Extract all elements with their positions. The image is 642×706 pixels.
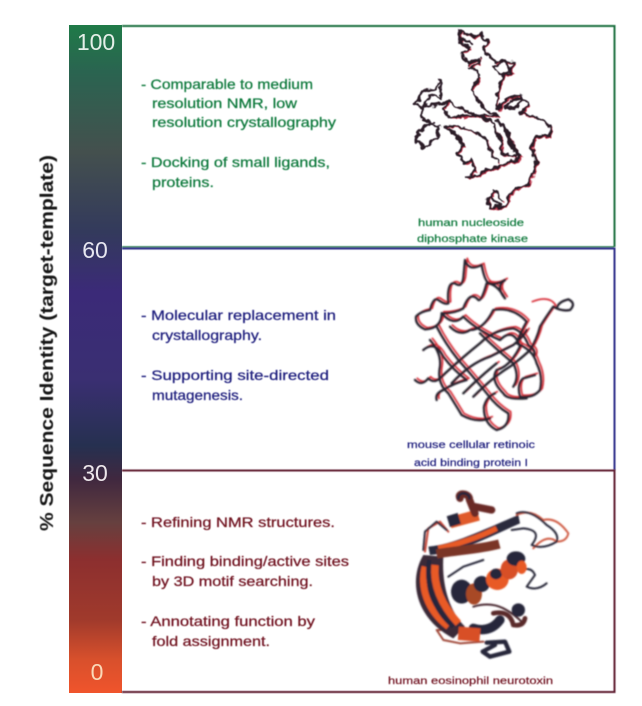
panel: medium identity <box>122 248 614 470</box>
scale label 100: 100 <box>77 29 115 55</box>
caption: kinase: human nucleoside <box>418 218 525 229</box>
caption: retinoic protein: mouse cellular retinoic <box>407 440 535 451</box>
gradient scale bar <box>69 25 122 693</box>
medium identity text: mutagenesis. <box>152 387 243 403</box>
high identity text <box>141 76 336 190</box>
lower helix <box>458 603 525 635</box>
caption: kinase <box>417 218 529 245</box>
bottom knot <box>483 642 509 657</box>
scale label 60: 60 <box>82 237 108 263</box>
high identity text: proteins. <box>152 174 214 190</box>
middle helix <box>451 551 527 605</box>
panel: high identity <box>122 26 614 247</box>
caption: neurotoxin: human eosinophil neurotoxin <box>388 676 553 687</box>
axis title: % Sequence Identity (target-template) <box>37 155 57 531</box>
caption: retinoic protein: acid binding protein I <box>414 458 528 469</box>
protein: nucleoside diphosphate kinase <box>413 32 551 209</box>
low identity text: by 3D motif searching. <box>152 573 313 589</box>
upper beta strands <box>428 515 520 555</box>
low identity text: - Finding binding/active sites <box>141 553 349 569</box>
medium identity text: crystallography. <box>152 327 262 343</box>
thin loops <box>423 512 568 643</box>
scale label 30: 30 <box>82 460 108 486</box>
high identity text: resolution crystallography <box>152 114 336 130</box>
low identity text <box>141 514 349 649</box>
caption: kinase: diphosphate kinase <box>417 234 529 245</box>
caption: retinoic protein <box>407 440 535 469</box>
panel: low identity <box>122 470 614 692</box>
top small helix <box>450 515 478 523</box>
scale label 0: 0 <box>91 659 103 685</box>
low identity text: fold assignment. <box>152 633 270 649</box>
high identity text: resolution NMR, low <box>152 95 298 111</box>
protein: eosinophil neurotoxin <box>416 493 568 657</box>
main beta strand <box>416 555 465 638</box>
medium identity text <box>141 307 336 403</box>
protein: retinoic acid binding protein <box>415 258 573 430</box>
medium identity text: - Supporting site-directed <box>141 367 329 383</box>
low identity text: - Refining NMR structures. <box>141 514 335 530</box>
medium identity text: - Molecular replacement in <box>141 307 336 323</box>
high identity text: - Comparable to medium <box>141 76 313 92</box>
low identity text: - Annotating function by <box>141 613 315 629</box>
high identity text: - Docking of small ligands, <box>141 154 330 170</box>
